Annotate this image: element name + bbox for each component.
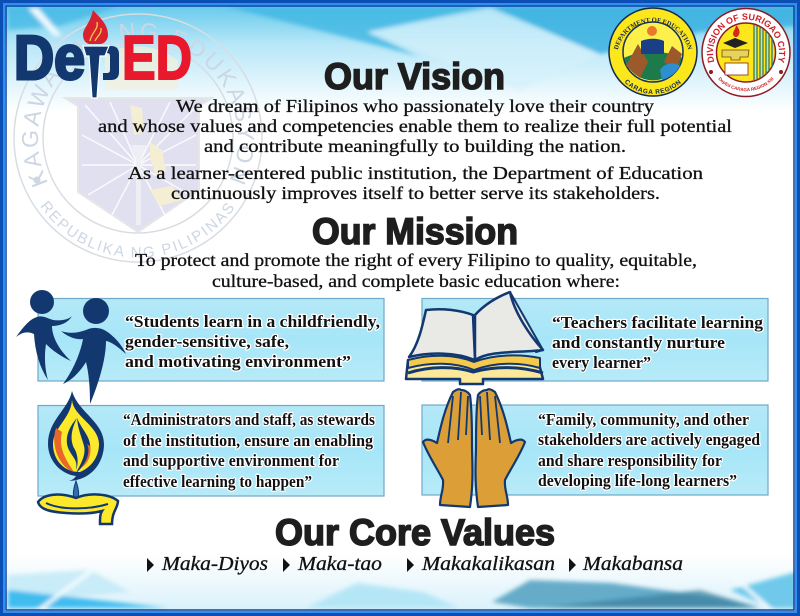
panel: teachers [422, 298, 768, 381]
vision text [98, 96, 732, 203]
seal: DepEd Caraga region [608, 7, 698, 97]
icon: open book [406, 292, 543, 384]
logo letter p bowl [100, 46, 119, 80]
seal: DepEd Caraga region: DEPARTMENT OF EDUCATION [614, 18, 692, 50]
mission intro text: To protect and promote the right of every Filipino to quality, equitable, [135, 250, 697, 270]
icon: open hands [423, 389, 525, 507]
administrators text: “Administrators and staff, as stewards [123, 410, 376, 429]
family text: stakeholders are actively engaged [538, 430, 760, 449]
family text: developing life-long learners” [538, 471, 737, 490]
teachers text: every learner” [552, 353, 651, 372]
students text: gender-sensitive, safe, [125, 332, 289, 351]
vision text: continuously improves itself to better serve its stakeholders. [171, 183, 660, 203]
value: Makabansa: Makabansa [582, 553, 683, 575]
value: Makakalikasan: Makakalikasan [421, 553, 555, 575]
heading: Our Vision: Our Vision [324, 56, 505, 97]
seal: Division of Surigao City [701, 8, 791, 98]
seal: Division of Surigao City: DIVISION OF SURIGAO CITY [706, 13, 786, 64]
teachers text [552, 313, 764, 372]
value: Maka-Diyos: Maka-Diyos [161, 553, 268, 575]
administrators text [123, 410, 376, 491]
watermark seal: KAGAWARAN NG EDUKASYON [22, 23, 254, 188]
family text [538, 410, 760, 490]
teachers text: “Teachers facilitate learning [552, 313, 764, 332]
administrators text: of the institution, ensure an enabling [123, 431, 374, 450]
DepED logo: ED [122, 24, 192, 93]
icon: flame and lamp [38, 391, 118, 524]
panel: family and community [422, 405, 768, 495]
mission intro text [135, 250, 697, 291]
teachers text: and constantly nurture [552, 333, 725, 352]
vision text: We dream of Filipinos who passionately love their country [176, 96, 654, 116]
mission intro text: culture-based, and complete basic education where: [212, 271, 620, 291]
icon: children [16, 290, 126, 404]
students text: “Students learn in a childfriendly, [125, 312, 380, 331]
logo torch [83, 10, 109, 98]
heading: Our Mission: Our Mission [312, 211, 518, 252]
seal: Division of Surigao City: DepEd CARAGA REGION XIII [718, 77, 774, 92]
administrators text: effective learning to happen” [123, 472, 312, 491]
panel: students [38, 298, 384, 381]
core values list [147, 553, 683, 575]
panel: administrators [38, 406, 384, 496]
students text [125, 312, 380, 371]
seal: DepEd Caraga region: CARAGA REGION [625, 80, 681, 94]
DepED logo [14, 10, 192, 98]
administrators text: and supportive environment for [123, 451, 339, 470]
vision text: and whose values and competencies enable them to realize their full potential [98, 116, 732, 136]
vision text: As a learner-centered public institution, the Department of Education [128, 163, 703, 183]
vision text: and contribute meaningfully to building the nation. [204, 136, 626, 156]
students text: and motivating environment” [125, 352, 351, 371]
heading: Our Core Values: Our Core Values [275, 512, 555, 553]
family text: and share responsibility for [538, 451, 722, 470]
watermark seal [13, 13, 263, 263]
family text: “Family, community, and other [538, 410, 749, 429]
value: Maka-tao: Maka-tao [297, 553, 382, 575]
watermark seal: REPUBLIKA NG PILIPINAS [40, 200, 234, 258]
DepED logo: De [14, 24, 85, 93]
